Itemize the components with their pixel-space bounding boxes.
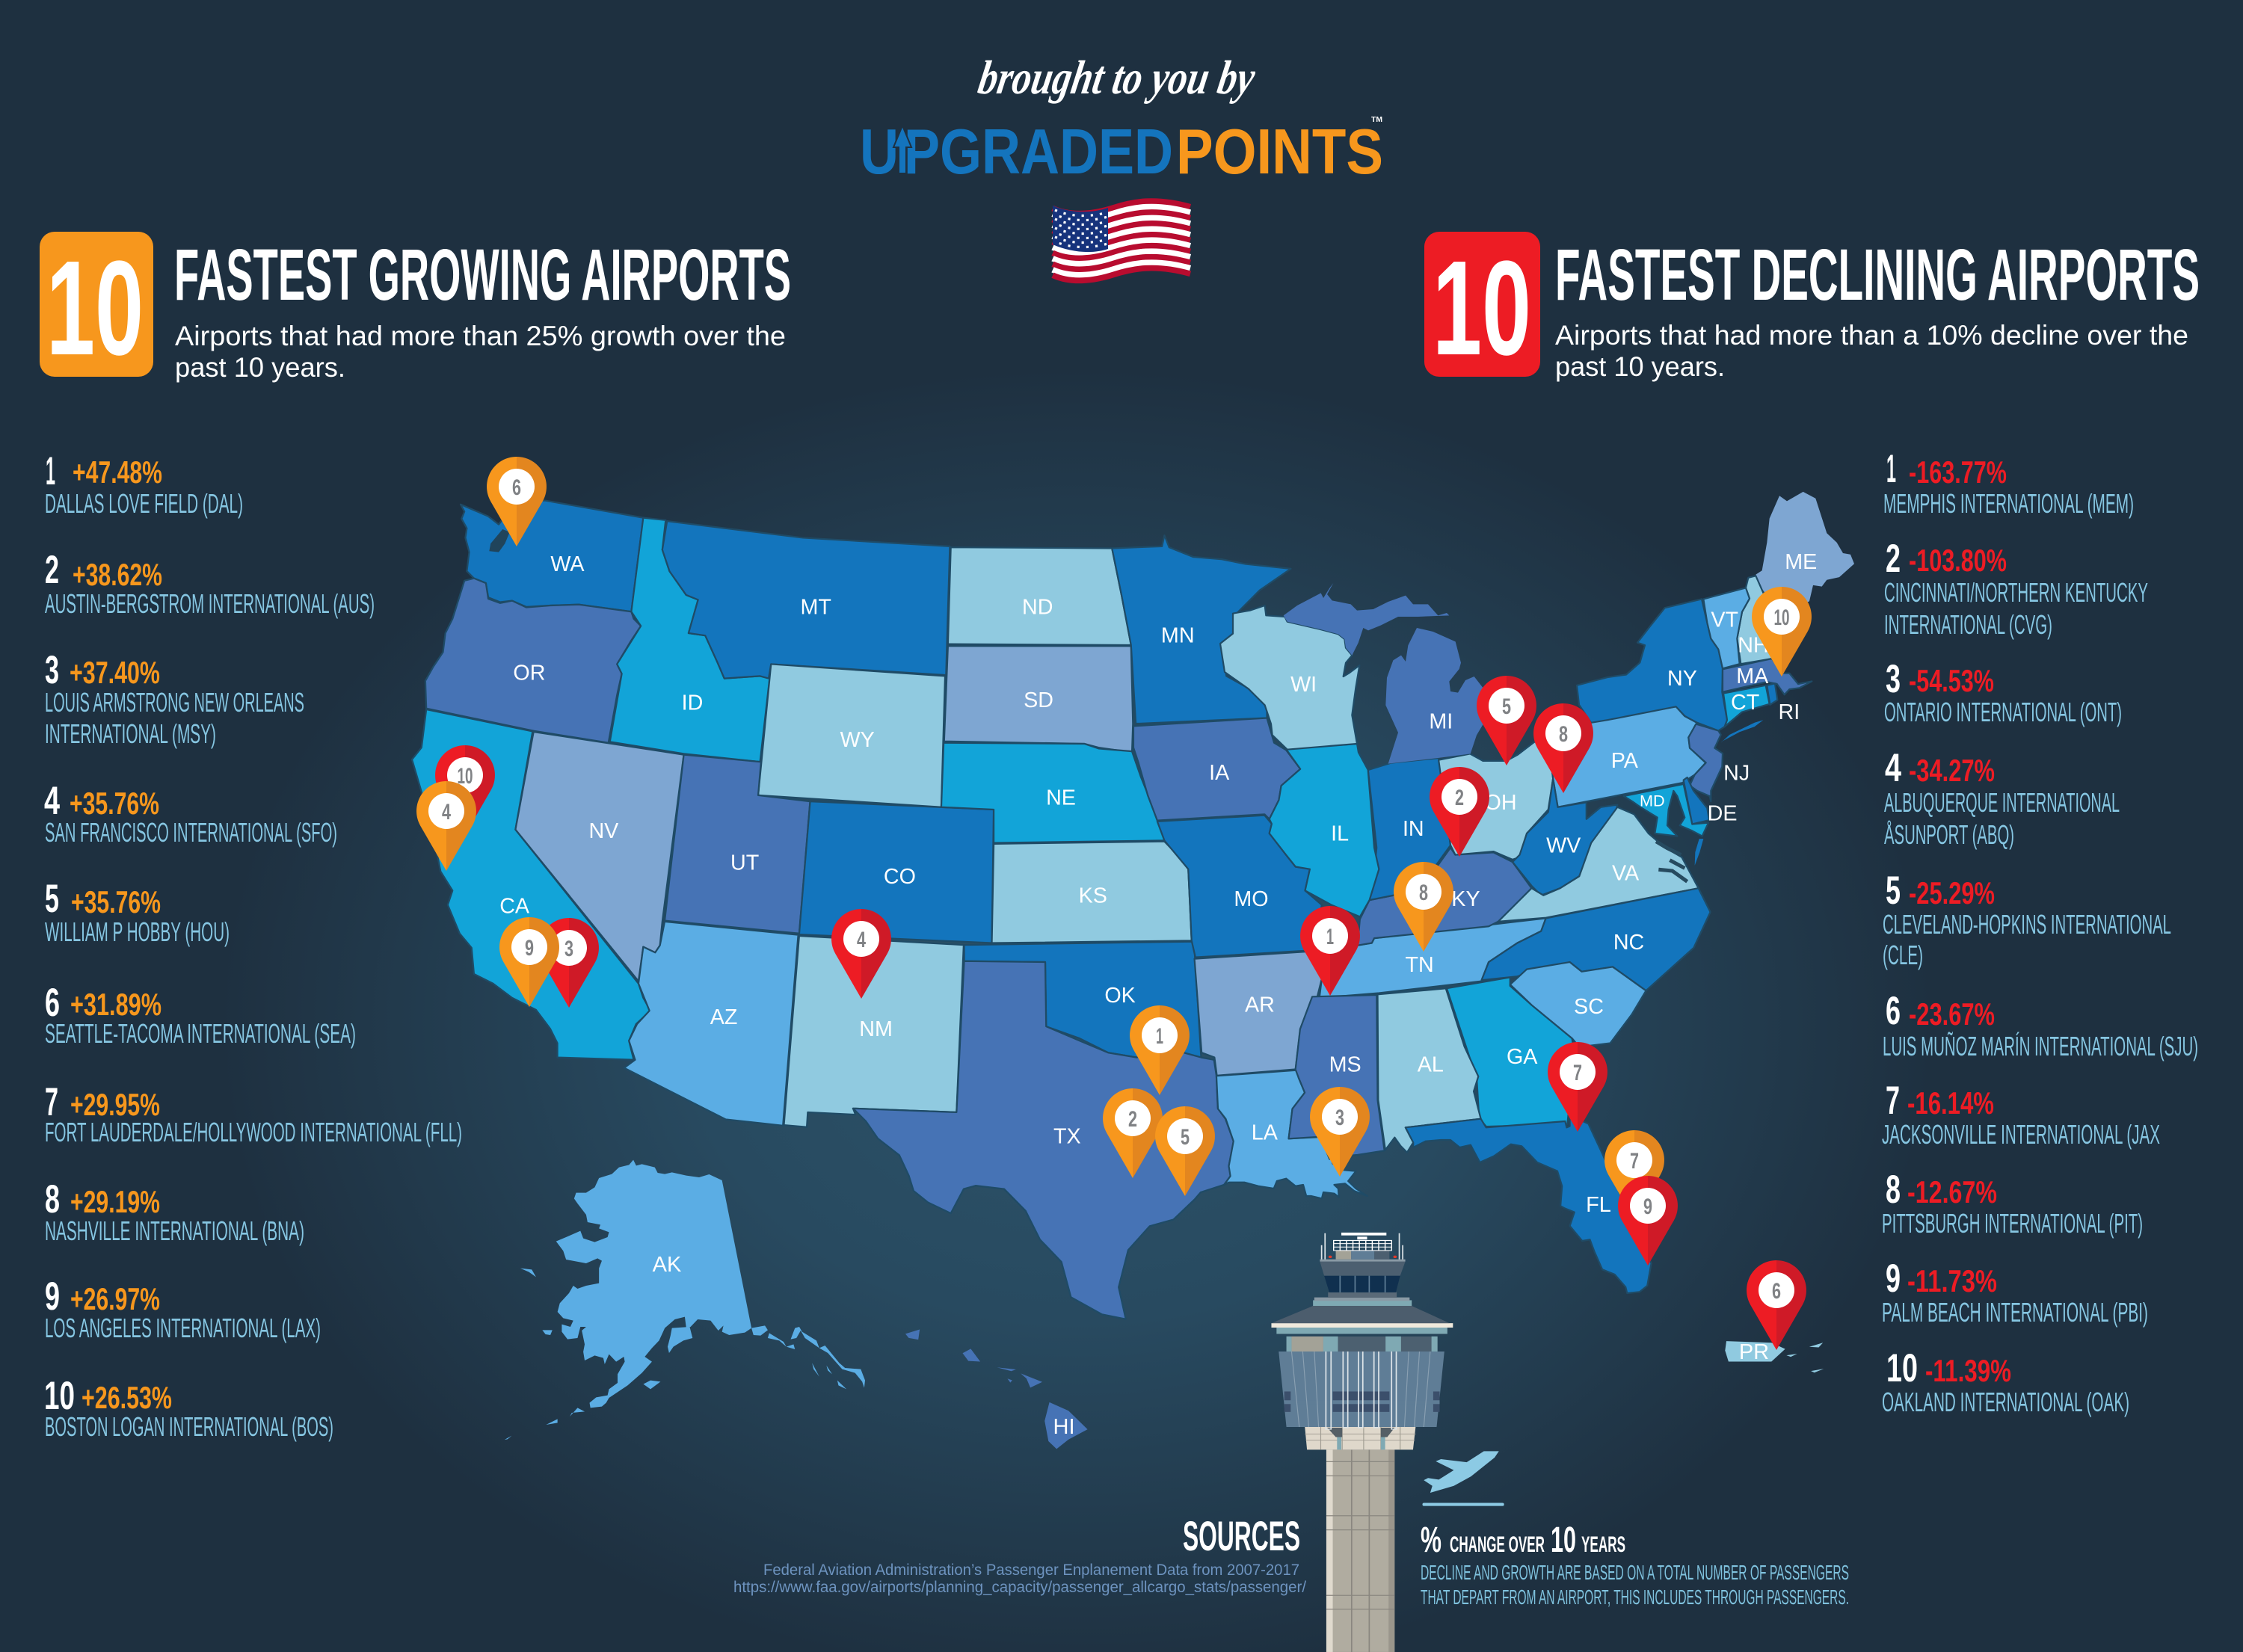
state labels, east: RI bbox=[1779, 700, 1800, 724]
state labels, FL AK HI PR: PR bbox=[1739, 1340, 1769, 1364]
declining rank 7: 7 bbox=[1886, 1079, 1900, 1123]
growing rank 3 bbox=[45, 648, 304, 749]
state labels, west: MT bbox=[800, 595, 831, 619]
map: Alaska bbox=[505, 1160, 865, 1440]
declining description: Airports that had more than a 10% decline over the bbox=[1555, 320, 2188, 351]
tower radar and antennas bbox=[1322, 1233, 1403, 1260]
pin: growing 10 BOS bbox=[1752, 587, 1812, 676]
growing rank 4 bbox=[44, 779, 337, 848]
growing rank 8: +29.19% bbox=[70, 1184, 160, 1219]
pin: declining 10 OAK: 10 bbox=[458, 764, 473, 789]
state labels, west: CA bbox=[499, 894, 530, 918]
tower shaft bbox=[1326, 1449, 1394, 1652]
state NY bbox=[1577, 599, 1727, 730]
declining rank 4: -34.27% bbox=[1909, 753, 1995, 788]
declining rank 4: ÅSUNPORT (ABQ) bbox=[1884, 819, 2014, 850]
pin: declining 5 CLE: 5 bbox=[1502, 694, 1511, 719]
growing rank 9 bbox=[45, 1275, 321, 1343]
state OK bbox=[964, 942, 1202, 1058]
pin: declining 5 CLE bbox=[1477, 676, 1536, 765]
red badge 10 bbox=[1424, 232, 1540, 383]
icon: American flag bbox=[1053, 201, 1190, 280]
state WV bbox=[1513, 779, 1617, 896]
state TX bbox=[853, 961, 1234, 1319]
growing rank 3: LOUIS ARMSTRONG NEW ORLEANS bbox=[45, 687, 304, 718]
state labels, west: OR bbox=[513, 661, 545, 685]
state labels, west: OK bbox=[1104, 984, 1136, 1008]
state labels, east: GA bbox=[1507, 1045, 1538, 1069]
virginia eastern shore bbox=[1695, 839, 1703, 866]
pin: declining 8 PIT bbox=[1533, 703, 1593, 793]
state KY bbox=[1358, 848, 1531, 946]
pin: growing 9 LAX: 9 bbox=[525, 936, 534, 961]
state labels, west: SD bbox=[1024, 688, 1053, 712]
declining rank 1 bbox=[1883, 447, 2134, 519]
state labels, east: VA bbox=[1612, 861, 1640, 885]
declining rank 1: 1 bbox=[1886, 447, 1896, 491]
state labels, west: AZ bbox=[710, 1005, 737, 1029]
pin: declining 2 CVG bbox=[1430, 767, 1489, 857]
growing rank 5 bbox=[45, 877, 230, 947]
state labels, east: MO bbox=[1234, 887, 1269, 911]
methodology note bbox=[1421, 1520, 1849, 1609]
state NC bbox=[1482, 888, 1711, 990]
state labels, FL AK HI PR: HI bbox=[1053, 1415, 1075, 1439]
sources block bbox=[733, 1512, 1306, 1596]
growing rank 7: 7 bbox=[45, 1080, 58, 1124]
state DE bbox=[1684, 777, 1709, 824]
state labels, east: MN bbox=[1161, 624, 1195, 648]
map: Puerto Rico bbox=[1725, 1341, 1824, 1372]
state labels, east: MD bbox=[1640, 791, 1665, 810]
pin: growing 2 AUS: 2 bbox=[1128, 1107, 1137, 1132]
pin: growing 7 FLL: 7 bbox=[1630, 1149, 1639, 1174]
orange badge 10: 10 bbox=[46, 233, 144, 383]
growing rank 3: +37.40% bbox=[70, 655, 160, 690]
state labels, west bbox=[499, 552, 1136, 1148]
pin: declining 2 CVG: 2 bbox=[1455, 786, 1464, 810]
state SC bbox=[1510, 962, 1646, 1047]
note body bbox=[1421, 1561, 1849, 1609]
state MA bbox=[1723, 659, 1812, 694]
declining rank 8 bbox=[1882, 1168, 2143, 1239]
state NJ bbox=[1688, 724, 1723, 801]
state labels, east: MS bbox=[1329, 1053, 1362, 1077]
state MI upper peninsula bbox=[1284, 583, 1449, 656]
pin: declining 3 ONT bbox=[539, 918, 599, 1008]
pin: growing 8 BNA bbox=[1394, 862, 1453, 952]
state WY bbox=[758, 664, 945, 807]
declining rank 6 bbox=[1883, 989, 2198, 1061]
declining rank 7: -16.14% bbox=[1907, 1085, 1994, 1121]
state labels, west: UT bbox=[730, 851, 759, 875]
pin: growing 10 BOS: 10 bbox=[1773, 605, 1790, 630]
declining rank 3 bbox=[1884, 657, 2122, 727]
state ME bbox=[1756, 492, 1854, 617]
state RI bbox=[1767, 683, 1777, 705]
state MO bbox=[1157, 816, 1322, 958]
sources citation: https://www.faa.gov/airports/planning_capacity/passenger_allcargo_stats/passenger/ bbox=[733, 1579, 1306, 1596]
state CO bbox=[799, 801, 994, 943]
note heading: CHANGE OVER bbox=[1450, 1532, 1545, 1557]
sponsor logo block bbox=[860, 51, 1383, 188]
state NM bbox=[784, 936, 964, 1127]
state VT bbox=[1703, 588, 1750, 668]
state labels, east: NH bbox=[1738, 634, 1769, 658]
state labels, east bbox=[1161, 550, 1817, 1144]
note heading: % bbox=[1421, 1520, 1442, 1560]
state labels, west: TX bbox=[1053, 1124, 1081, 1148]
growing rank 9: 9 bbox=[45, 1275, 60, 1319]
growing rank 6: 6 bbox=[45, 981, 60, 1025]
declining rank 2 bbox=[1884, 537, 2148, 640]
pin: declining 6 SJU: 6 bbox=[1772, 1279, 1781, 1304]
pin: declining 3 ONT: 3 bbox=[564, 937, 573, 961]
red badge 10: 10 bbox=[1433, 233, 1531, 383]
note heading: 10 bbox=[1551, 1520, 1576, 1560]
note body: DECLINE AND GROWTH ARE BASED ON A TOTAL NUMBER OF PASSENGERS bbox=[1421, 1561, 1849, 1584]
state NE bbox=[941, 743, 1164, 843]
pin: growing 8 BNA: 8 bbox=[1419, 881, 1428, 905]
state MT bbox=[662, 521, 950, 679]
map pins: growing and declining airports bbox=[416, 457, 1812, 1350]
growing rank 2: AUSTIN-BERGSTROM INTERNATIONAL (AUS) bbox=[45, 588, 375, 619]
state MD bbox=[1624, 784, 1708, 836]
state labels, east: DE bbox=[1708, 802, 1738, 826]
growing rank 5: WILLIAM P HOBBY (HOU) bbox=[45, 916, 230, 947]
map: Hawaii bbox=[905, 1330, 1088, 1449]
growing description bbox=[175, 321, 786, 383]
state labels, east: KY bbox=[1451, 887, 1480, 911]
pin: declining 8 PIT: 8 bbox=[1559, 722, 1568, 747]
list: declining airports bbox=[1882, 447, 2198, 1417]
declining rank 5 bbox=[1883, 869, 2171, 970]
state CA bbox=[412, 709, 650, 1060]
growing rank 10 bbox=[44, 1374, 333, 1442]
growing rank 6: +31.89% bbox=[70, 987, 161, 1022]
state labels, FL AK HI PR: AK bbox=[653, 1253, 682, 1277]
state OR bbox=[425, 579, 641, 743]
state VA bbox=[1498, 807, 1699, 922]
state AL bbox=[1378, 988, 1481, 1153]
declining rank 5: (CLE) bbox=[1883, 940, 1923, 970]
state labels, west: CO bbox=[884, 865, 916, 889]
state labels, east: MI bbox=[1429, 710, 1453, 734]
pin: growing 5 HOU bbox=[1155, 1106, 1215, 1196]
state KS bbox=[992, 842, 1192, 943]
pin: growing 6 SEA: 6 bbox=[512, 475, 521, 500]
growing rank 8 bbox=[45, 1177, 304, 1246]
declining rank 2: 2 bbox=[1886, 537, 1901, 581]
declining rank 5: -25.29% bbox=[1909, 875, 1995, 910]
state WI bbox=[1220, 605, 1359, 750]
map: Northeast states bbox=[1577, 492, 1854, 881]
state SD bbox=[944, 646, 1133, 752]
pin: declining 4 ABQ: 4 bbox=[857, 928, 866, 952]
pin: growing 3 MSY bbox=[1310, 1087, 1370, 1177]
state CT bbox=[1723, 685, 1770, 727]
map: Great Lakes states bbox=[1220, 583, 1484, 764]
declining rank 10: 10 bbox=[1886, 1346, 1918, 1390]
state MI lower peninsula bbox=[1385, 628, 1484, 764]
declining rank 2: INTERNATIONAL (CVG) bbox=[1884, 609, 2052, 640]
state labels, west: KS bbox=[1079, 884, 1107, 907]
pin: declining 7 JAX: 7 bbox=[1573, 1061, 1582, 1085]
state labels, west: NM bbox=[859, 1017, 893, 1041]
long island bbox=[1721, 720, 1763, 743]
declining rank 6: 6 bbox=[1886, 989, 1901, 1033]
pin: growing 4 SFO: 4 bbox=[442, 800, 451, 825]
growing rank 2: +38.62% bbox=[73, 557, 162, 592]
state labels, west: ND bbox=[1022, 595, 1053, 619]
state labels, east: PA bbox=[1611, 749, 1639, 773]
growing rank 9: LOS ANGELES INTERNATIONAL (LAX) bbox=[45, 1313, 321, 1343]
orange badge 10 bbox=[40, 232, 153, 383]
heading: fastest declining bbox=[1424, 232, 2200, 383]
state labels, east: TN bbox=[1405, 953, 1434, 977]
pin: declining 4 ABQ bbox=[831, 909, 891, 999]
state PA bbox=[1548, 706, 1705, 807]
state labels, east: SC bbox=[1574, 995, 1604, 1019]
heading: fastest growing bbox=[40, 232, 791, 383]
map: contiguous United States, central and east bbox=[1112, 535, 1711, 1126]
state labels, west: ID bbox=[682, 691, 703, 715]
growing rank 8: NASHVILLE INTERNATIONAL (BNA) bbox=[45, 1215, 304, 1246]
state labels, east: NY bbox=[1667, 667, 1697, 691]
declining rank 10: -11.39% bbox=[1925, 1353, 2011, 1388]
state IN bbox=[1368, 758, 1450, 900]
state labels, east: AL bbox=[1418, 1053, 1444, 1077]
state labels, east: CT bbox=[1731, 691, 1759, 715]
declining rank 1: -163.77% bbox=[1909, 454, 2007, 490]
state labels, west: WA bbox=[550, 552, 585, 576]
growing rank 3: 3 bbox=[45, 648, 59, 692]
growing rank 8: 8 bbox=[45, 1177, 60, 1221]
declining rank 9: -11.73% bbox=[1907, 1263, 1997, 1298]
pin: declining 1 MEM bbox=[1300, 906, 1360, 996]
state labels, east: MA bbox=[1736, 665, 1769, 688]
puget sound bbox=[489, 529, 510, 552]
state labels, FL AK HI PR bbox=[653, 1193, 1769, 1439]
brought to you by script: brought to you by bbox=[975, 51, 1259, 104]
growing rank 2 bbox=[45, 548, 375, 619]
growing rank 4: +35.76% bbox=[70, 786, 159, 821]
tower cab bbox=[1279, 1349, 1444, 1429]
declining rank 4 bbox=[1884, 746, 2120, 850]
growing rank 6: SEATTLE-TACOMA INTERNATIONAL (SEA) bbox=[45, 1018, 356, 1049]
chesapeake inlets bbox=[1656, 842, 1687, 881]
pin: growing 5 HOU: 5 bbox=[1181, 1125, 1190, 1150]
logo wordmark bbox=[860, 116, 1383, 188]
state labels, west: NE bbox=[1046, 786, 1076, 810]
pin: growing 6 SEA bbox=[487, 457, 547, 546]
growing rank 6 bbox=[45, 981, 356, 1049]
state OH bbox=[1439, 733, 1553, 860]
state labels, east: NJ bbox=[1723, 761, 1750, 785]
declining rank 7 bbox=[1882, 1079, 2160, 1150]
state labels, east: OH bbox=[1485, 791, 1517, 815]
list: growing airports bbox=[44, 449, 462, 1442]
growing rank 7 bbox=[45, 1080, 462, 1147]
state MS bbox=[1289, 995, 1385, 1159]
pin: growing 9 LAX bbox=[499, 917, 559, 1007]
state AR bbox=[1195, 952, 1322, 1076]
pin: growing 1 DAL bbox=[1130, 1005, 1190, 1095]
growing rank 7: +29.95% bbox=[70, 1087, 160, 1122]
growing rank 1: +47.48% bbox=[73, 454, 162, 490]
pin: growing 1 DAL: 1 bbox=[1156, 1024, 1163, 1049]
declining rank 8: 8 bbox=[1886, 1168, 1901, 1212]
state labels, east: IA bbox=[1209, 761, 1230, 785]
state AZ bbox=[624, 922, 799, 1126]
declining rank 8: -12.67% bbox=[1907, 1174, 1997, 1209]
growing rank 9: +26.97% bbox=[70, 1281, 160, 1316]
pin: growing 7 FLL bbox=[1604, 1130, 1664, 1220]
growing rank 10: +26.53% bbox=[81, 1380, 172, 1415]
state ID bbox=[610, 518, 769, 762]
state UT bbox=[665, 755, 810, 934]
icon: plane taking off bbox=[1423, 1451, 1504, 1506]
note heading bbox=[1421, 1520, 1625, 1560]
growing rank 7: FORT LAUDERDALE/HOLLYWOOD INTERNATIONAL (FLL) bbox=[45, 1117, 462, 1147]
pin: declining 10 OAK bbox=[435, 745, 495, 835]
declining rank 2: -103.80% bbox=[1909, 543, 2007, 578]
note body: THAT DEPART FROM AN AIRPORT, THIS INCLUDES THROUGH PASSENGERS. bbox=[1421, 1585, 1849, 1609]
declining rank 4: 4 bbox=[1885, 746, 1901, 790]
growing rank 5: 5 bbox=[45, 877, 59, 921]
tower mid section and roof bbox=[1271, 1292, 1453, 1352]
growing description: past 10 years. bbox=[175, 352, 345, 383]
state labels, east: LA bbox=[1252, 1121, 1279, 1144]
pin: growing 4 SFO bbox=[416, 781, 476, 871]
growing rank 3: INTERNATIONAL (MSY) bbox=[45, 718, 216, 749]
growing rank 10: 10 bbox=[44, 1374, 75, 1418]
state labels, east: WV bbox=[1546, 833, 1581, 857]
logo wordmark: TM bbox=[1371, 116, 1382, 124]
declining rank 9: 9 bbox=[1886, 1257, 1901, 1301]
state labels, east: VT bbox=[1711, 608, 1738, 632]
pin: declining 6 SJU bbox=[1747, 1260, 1806, 1350]
state labels, west: NV bbox=[588, 819, 619, 843]
state LA bbox=[1216, 1070, 1367, 1198]
state IL bbox=[1270, 744, 1379, 916]
declining rank 3: 3 bbox=[1886, 657, 1901, 701]
declining rank 3: -54.53% bbox=[1909, 663, 1994, 698]
illustration: air traffic control tower bbox=[1271, 1233, 1453, 1652]
state labels, east: ME bbox=[1785, 550, 1817, 574]
map: Gulf states bbox=[1216, 988, 1652, 1293]
growing title: FASTEST GROWING AIRPORTS bbox=[174, 234, 791, 315]
growing rank 1: DALLAS LOVE FIELD (DAL) bbox=[45, 488, 243, 519]
state NV bbox=[515, 732, 684, 981]
state IA bbox=[1133, 718, 1300, 821]
pin: growing 3 MSY: 3 bbox=[1335, 1106, 1344, 1130]
pin: declining 9 PBI: 9 bbox=[1643, 1195, 1652, 1219]
growing description: Airports that had more than 25% growth over the bbox=[175, 321, 786, 351]
state labels, east: IL bbox=[1331, 822, 1349, 845]
growing rank 2: 2 bbox=[45, 548, 59, 592]
sources citation bbox=[733, 1562, 1306, 1596]
growing rank 1: 1 bbox=[46, 449, 55, 493]
growing rank 4: 4 bbox=[44, 779, 60, 823]
state labels, east: IN bbox=[1403, 817, 1424, 841]
state WA bbox=[461, 499, 643, 611]
pin: growing 2 AUS bbox=[1103, 1088, 1163, 1178]
logo wordmark: POINTS bbox=[1176, 117, 1383, 188]
map: contiguous United States, west bbox=[412, 499, 1234, 1319]
growing rank 5: +35.76% bbox=[71, 884, 161, 919]
declining description bbox=[1555, 320, 2188, 382]
declining rank 5: 5 bbox=[1886, 869, 1901, 913]
note heading: YEARS bbox=[1581, 1532, 1625, 1557]
state labels, west: WY bbox=[840, 728, 875, 752]
state GA bbox=[1447, 977, 1575, 1126]
pin: declining 9 PBI bbox=[1618, 1176, 1678, 1266]
pin: declining 7 JAX bbox=[1548, 1042, 1607, 1132]
sources citation: Federal Aviation Administration’s Passenger Enplanement Data from 2007-2017 bbox=[763, 1562, 1299, 1579]
growing rank 10: BOSTON LOGAN INTERNATIONAL (BOS) bbox=[45, 1411, 333, 1442]
sources heading: SOURCES bbox=[1183, 1512, 1300, 1559]
state labels, east: AR bbox=[1245, 993, 1275, 1017]
state NH bbox=[1737, 576, 1772, 664]
state FL bbox=[1406, 1112, 1652, 1293]
pin: declining 1 MEM: 1 bbox=[1326, 925, 1334, 949]
state labels, east: NC bbox=[1613, 931, 1644, 955]
growing rank 1 bbox=[45, 449, 243, 519]
logo wordmark: PGRADED bbox=[904, 117, 1173, 188]
declining description: past 10 years. bbox=[1555, 351, 1725, 382]
state labels, FL AK HI PR: FL bbox=[1586, 1193, 1611, 1217]
tower base platform bbox=[1305, 1427, 1415, 1449]
declining rank 9 bbox=[1882, 1257, 2148, 1328]
state labels, east: WI bbox=[1290, 673, 1317, 697]
declining rank 10 bbox=[1882, 1346, 2129, 1417]
declining rank 6: -23.67% bbox=[1909, 996, 1995, 1032]
state ND bbox=[948, 547, 1131, 645]
growing rank 4: SAN FRANCISCO INTERNATIONAL (SFO) bbox=[45, 817, 337, 848]
tower upper cab windows bbox=[1320, 1251, 1406, 1292]
state TN bbox=[1310, 918, 1546, 998]
state MN bbox=[1112, 535, 1290, 724]
logo wordmark: U bbox=[860, 117, 899, 188]
